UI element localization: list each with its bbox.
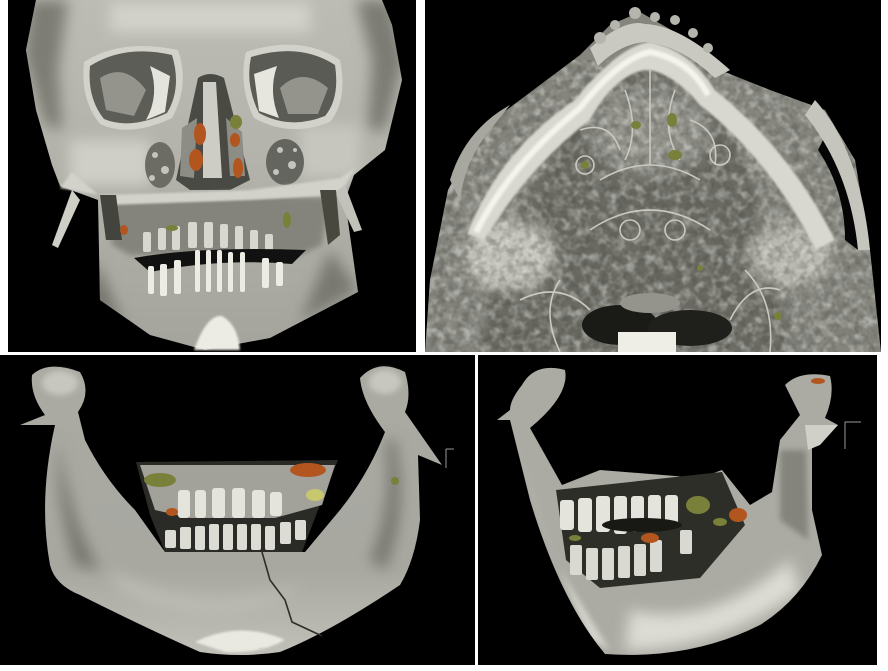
infection marks: [581, 113, 782, 320]
panel: frontal mandible: [0, 355, 475, 665]
upper teeth block: [140, 465, 335, 518]
lower teeth: [148, 250, 283, 296]
maxilla mottled plate: [108, 194, 330, 255]
upper teeth: [560, 495, 678, 534]
fracture line: [262, 552, 322, 636]
mandible body: [20, 366, 442, 655]
mandible body: [497, 368, 838, 655]
mandible arch: [467, 42, 835, 250]
left eye orbit: [83, 46, 183, 130]
right eye orbit: [243, 45, 342, 129]
infection marks: [144, 463, 399, 649]
panel: inferior skull base view: [425, 0, 881, 352]
mandible chin highlight: [194, 316, 240, 350]
scale marker: [845, 422, 861, 449]
teeth background: [556, 472, 745, 588]
zygomatic struts: [52, 190, 80, 248]
outer bony areas: [465, 85, 832, 290]
left ramus: [450, 105, 510, 200]
bright lower body shading: [515, 430, 808, 650]
textured palate: [480, 65, 790, 352]
right dark notch: [818, 130, 858, 250]
scale marker: [446, 449, 454, 468]
skull silhouette: [26, 0, 402, 350]
anterior teeth edge: [594, 7, 713, 53]
small infection marks on maxilla: [120, 212, 291, 235]
teeth group background: [136, 460, 338, 552]
condyle highlights: [42, 371, 78, 395]
chin highlight: [195, 630, 285, 652]
bone texture: [425, 60, 881, 352]
panel: oblique mandible: [478, 355, 877, 665]
lower teeth: [570, 530, 692, 580]
lower teeth row: [165, 520, 306, 550]
bone gap: [602, 518, 682, 532]
skull base silhouette: [425, 12, 881, 352]
teeth gap: [134, 249, 306, 272]
upper teeth: [143, 222, 273, 252]
maxillary sinus openings: [145, 139, 304, 188]
condyle notch fragment: [805, 425, 838, 450]
shading: cranium and jaw: [24, 0, 404, 328]
infection spots in nasal cavity: [189, 123, 243, 178]
midline dark holes: [582, 293, 732, 352]
palate bone lines: [520, 70, 780, 352]
shading on rami: [58, 440, 401, 613]
infection marks: [569, 378, 825, 543]
nasal aperture: [176, 74, 250, 190]
panel: frontal skull: [8, 0, 416, 352]
